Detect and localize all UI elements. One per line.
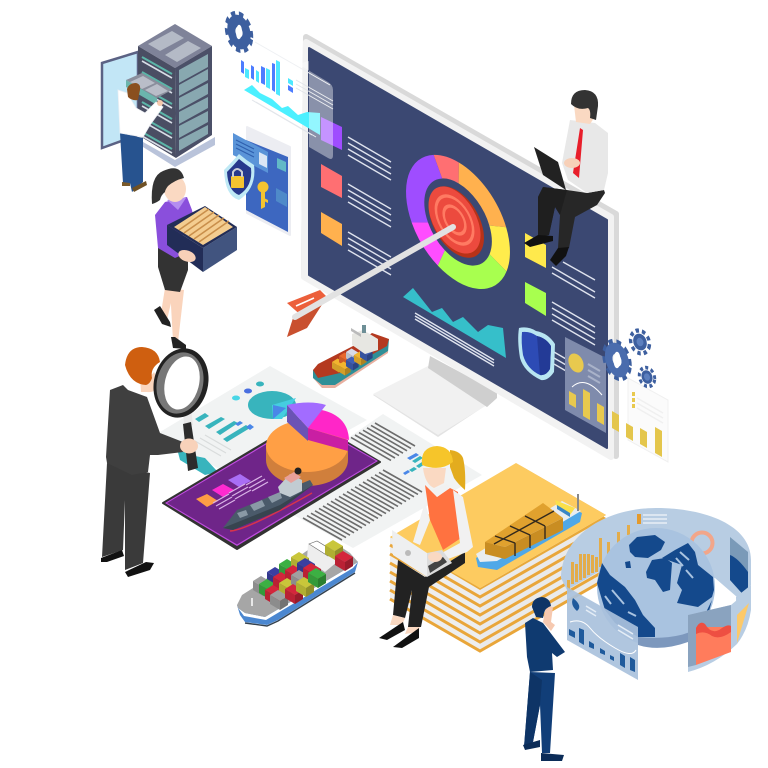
mini pie	[565, 351, 587, 375]
shoes	[379, 622, 405, 640]
head	[164, 176, 186, 202]
glass overlay panel	[298, 61, 333, 159]
collar	[432, 484, 450, 497]
hair and ponytail	[152, 168, 184, 204]
grey ship on tablet	[223, 468, 313, 531]
magenta slice	[308, 409, 349, 451]
necktie	[573, 128, 583, 178]
sheet pie chart	[248, 391, 296, 419]
sheet bars	[195, 413, 254, 442]
right face	[480, 518, 606, 652]
collar	[167, 198, 186, 210]
containers	[332, 348, 373, 376]
ground report sheet right	[290, 414, 482, 548]
holographic globe	[561, 508, 751, 680]
phone body	[247, 127, 290, 235]
containers	[485, 503, 563, 547]
shaft	[295, 227, 453, 317]
stack of papers	[390, 463, 606, 652]
ring	[146, 343, 216, 423]
sheet legend dots	[232, 382, 264, 400]
legs	[102, 463, 150, 570]
purple tablet	[163, 418, 380, 549]
rack right face	[175, 46, 212, 158]
trousers	[393, 552, 465, 627]
shield on screen	[518, 327, 555, 380]
legs	[161, 288, 174, 320]
screen legend squares	[321, 117, 546, 316]
small gear lower	[638, 365, 656, 389]
hair	[422, 446, 453, 468]
hull	[237, 558, 358, 625]
neck and face	[574, 105, 594, 124]
ring dark right panel	[730, 537, 748, 600]
red waterline	[230, 493, 312, 531]
hair and head	[140, 372, 160, 392]
server door	[102, 52, 138, 148]
monitor screen	[309, 48, 607, 448]
security phone	[224, 127, 290, 235]
donut ring segments	[406, 132, 510, 312]
gears near monitor	[603, 328, 656, 389]
shoes	[524, 235, 553, 247]
deck machinery	[237, 492, 282, 518]
area chart on screen	[403, 288, 506, 358]
ring gauge	[692, 532, 712, 554]
globe sphere	[597, 528, 715, 646]
hand	[180, 438, 198, 454]
3D pie chart	[266, 402, 349, 486]
skirt	[158, 245, 188, 292]
hand and face	[543, 605, 555, 631]
bridge	[352, 330, 378, 354]
hand on box	[177, 248, 197, 264]
mini squares	[288, 78, 293, 86]
shoes	[523, 740, 540, 750]
ring legend	[637, 514, 667, 524]
app tiles	[277, 158, 286, 172]
navy suited man	[523, 597, 565, 761]
tablet	[534, 147, 566, 190]
page edges	[390, 525, 606, 651]
file tabs	[174, 207, 233, 245]
orange base	[266, 446, 348, 486]
red chart panel	[688, 600, 737, 672]
rack right panels	[179, 54, 208, 151]
vest	[425, 485, 461, 550]
hull	[313, 339, 389, 386]
shirt	[562, 120, 608, 193]
arrow	[287, 227, 453, 337]
ring back band	[561, 508, 751, 597]
jacket	[525, 618, 565, 672]
monitor	[304, 37, 616, 457]
back sleeve	[413, 502, 430, 545]
purple slice	[287, 402, 326, 441]
sleeve	[438, 490, 473, 562]
server technician	[118, 83, 163, 192]
dashboard mini pie	[572, 598, 579, 611]
dashboard bars	[569, 628, 635, 672]
sheet small bars	[403, 453, 428, 475]
trousers	[524, 672, 555, 753]
handle	[183, 408, 193, 425]
profile card	[233, 133, 268, 173]
left face	[390, 537, 480, 652]
white rail	[238, 562, 358, 620]
laptop woman	[379, 446, 473, 648]
screen text lines	[348, 137, 604, 393]
hair	[532, 597, 551, 618]
pulled drawer	[126, 73, 172, 98]
faint data panel right of monitor	[628, 378, 668, 462]
rack left drawers	[142, 57, 172, 149]
box	[167, 206, 237, 272]
face	[423, 468, 446, 488]
ship bridge	[278, 474, 302, 497]
magnifier	[146, 343, 216, 471]
rack top	[138, 24, 212, 68]
monitor stand	[373, 356, 497, 437]
rack vents	[148, 31, 201, 62]
ring right front band	[736, 585, 751, 644]
sitting man on monitor	[524, 90, 608, 266]
shield with lock	[224, 154, 254, 200]
small cargo ship top	[313, 325, 389, 388]
fletching	[287, 290, 327, 337]
rack base	[143, 137, 215, 167]
hand	[564, 158, 580, 168]
hand	[157, 100, 163, 106]
woman carrying box	[152, 168, 237, 349]
magnifying man	[101, 343, 216, 577]
cargo barge	[476, 494, 582, 570]
ponytail	[450, 450, 465, 490]
hull	[223, 480, 313, 530]
laptop	[392, 530, 452, 577]
jacket	[106, 385, 183, 475]
tablet squares	[196, 474, 251, 507]
ground report sheet left	[155, 366, 367, 485]
shoes	[122, 182, 130, 186]
purple blouse	[155, 197, 195, 258]
monitor frame	[304, 37, 616, 457]
trousers	[120, 133, 143, 192]
top sheet	[390, 463, 606, 590]
gear top	[225, 8, 253, 56]
large gear	[603, 336, 631, 384]
phone screen	[246, 140, 288, 232]
outer yellow bars	[612, 411, 662, 457]
ankles	[390, 615, 405, 625]
bars	[241, 60, 280, 96]
shirt	[118, 90, 163, 137]
donut target chart	[406, 132, 510, 312]
rack left face	[138, 46, 176, 158]
container ship bottom	[237, 540, 358, 626]
cyan area	[244, 85, 320, 135]
shoes	[154, 306, 171, 327]
mini dashboard panel on screen	[565, 337, 606, 433]
hair	[571, 90, 598, 120]
containers	[253, 540, 353, 610]
server rack	[126, 24, 215, 167]
hand	[428, 552, 442, 562]
globe continents	[597, 535, 714, 642]
shoes	[101, 550, 124, 562]
tablet text lines	[213, 476, 268, 509]
hair and neck	[127, 83, 140, 100]
trousers	[538, 187, 605, 248]
sheet text lines	[351, 423, 415, 460]
small gear upper	[630, 328, 650, 356]
deck	[237, 543, 358, 617]
bridge	[307, 541, 337, 572]
wheelhouse	[555, 500, 575, 515]
floating bar chart	[241, 42, 333, 137]
target bullseye	[429, 174, 484, 270]
hull	[476, 503, 582, 570]
left dashboard panel	[567, 587, 638, 680]
sheet teal area chart	[175, 441, 218, 475]
mini bars	[569, 389, 604, 425]
key	[258, 182, 268, 209]
ring orange bars	[567, 525, 630, 589]
globe lower shade	[638, 632, 690, 648]
glass lines	[252, 80, 333, 137]
